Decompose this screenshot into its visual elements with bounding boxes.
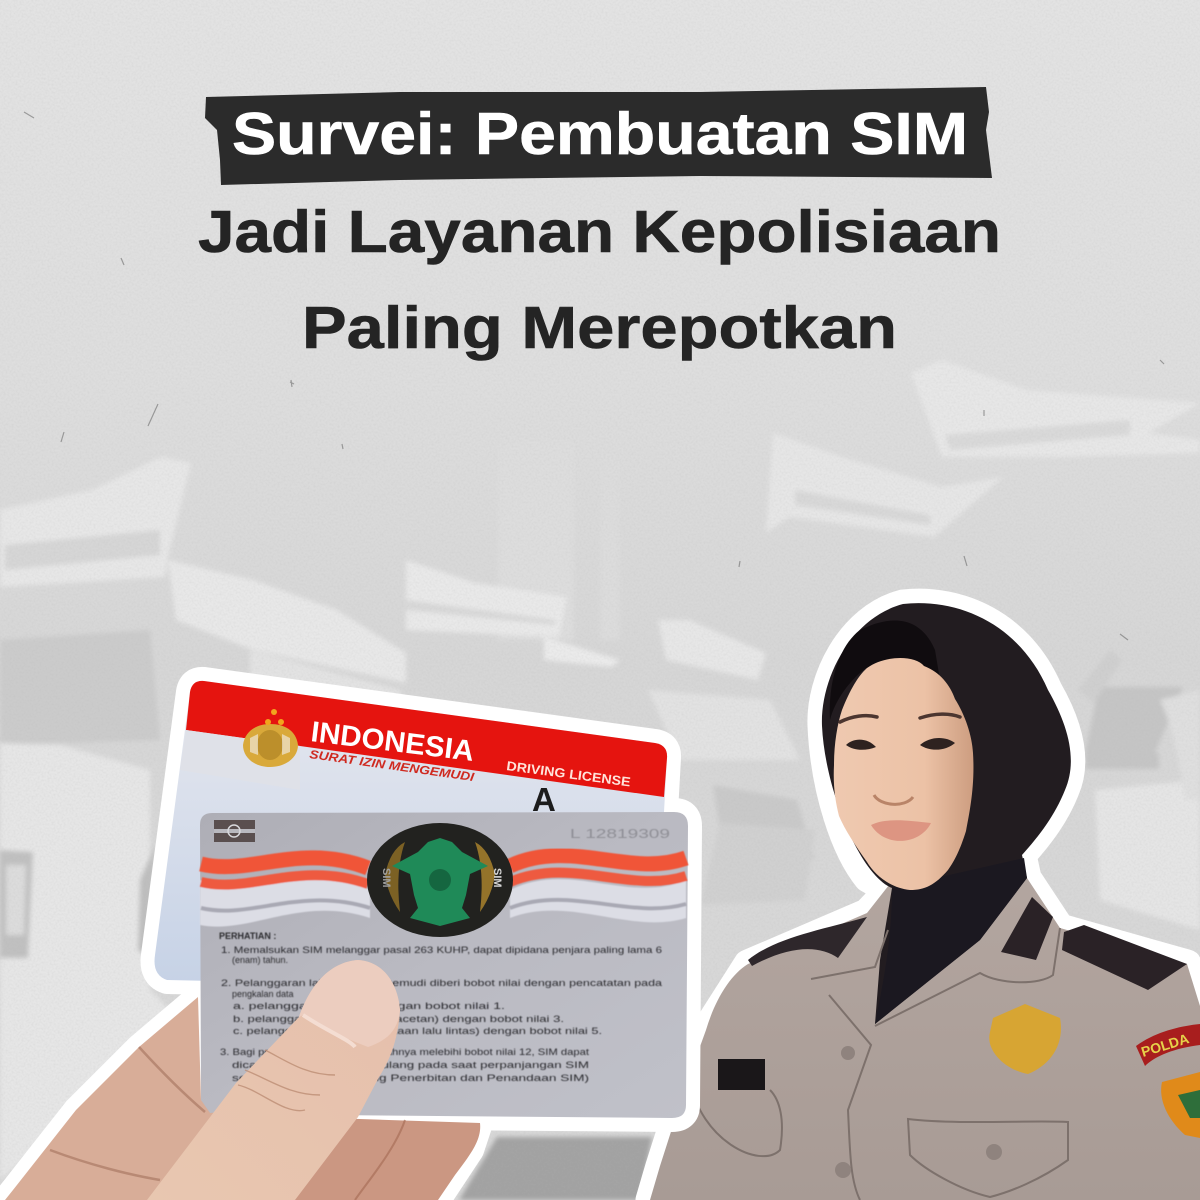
thumb [147, 960, 400, 1200]
shoulder patch [1136, 1024, 1200, 1138]
warning text: a. pelanggaran ringan dengan bobot nilai 1. [233, 1001, 505, 1011]
eyebrows and eyes [840, 714, 960, 750]
warning text: dicabut dan dilakukan uji ulang pada saat perpanjangan SIM [232, 1060, 589, 1070]
collar badge [1001, 897, 1053, 960]
title [198, 87, 1001, 361]
warning text: c. pelanggaran berat kecelakaan lalu lintas) dengan bobot nilai 5. [233, 1026, 602, 1036]
title line 1: Survei: Pembuatan SIM [232, 101, 968, 167]
title highlight banner [205, 87, 992, 185]
hologram seal [367, 823, 513, 937]
seal label left: SIM [380, 868, 392, 888]
warning text: 3. Bagi pemegang SIM yang jumlahnya melebihi bobot nilai 12, SIM dapat [220, 1047, 590, 1057]
hijab [822, 603, 1071, 1024]
white sticker outline [5, 681, 688, 1200]
warning text [219, 931, 662, 1083]
warning text: 2. Pelanggaran lalu lintas pengemudi diberi bobot nilai dengan pencatatan pada [221, 978, 662, 988]
patch label: POLDA [1139, 1030, 1191, 1060]
warning text: sesuai peraturan, tentang Penerbitan dan Penandaan SIM) [232, 1073, 589, 1083]
photo: policewoman [650, 603, 1200, 1200]
face [834, 658, 973, 890]
card subheading: SURAT IZIN MENGEMUDI [309, 747, 476, 784]
chip mark [214, 820, 255, 842]
warning text: (enam) tahun. [232, 955, 288, 965]
title line 3: Paling Merepotkan [302, 295, 897, 361]
uniform buttons [835, 1046, 1002, 1178]
scratches and flecks [24, 112, 1164, 640]
hand and thumb [5, 960, 480, 1200]
seal label right: SIM [491, 868, 503, 888]
uniform [650, 865, 1200, 1200]
right epaulette [1062, 925, 1187, 990]
left epaulette [748, 917, 867, 966]
license class: A [532, 781, 556, 818]
driving license label: DRIVING LICENSE [506, 758, 632, 790]
photo: hand holding SIM cards [5, 681, 688, 1200]
name tag [718, 1059, 765, 1090]
nose and lips [871, 795, 931, 841]
title line 2: Jadi Layanan Kepolisiaan [198, 199, 1001, 265]
police emblem [243, 709, 298, 767]
warning text: 1. Memalsukan SIM melanggar pasal 263 KUHP, dapat dipidana penjara paling lama 6 [221, 945, 662, 955]
warning text: PERHATIAN : [219, 931, 276, 941]
faded background photo: police officers in caps [0, 360, 1200, 1200]
card heading: INDONESIA [309, 716, 476, 768]
warning text: b. pelanggaran sedang kemacetan) dengan bobot nilai 3. [233, 1014, 564, 1024]
back card: Indonesia driving license [154, 681, 667, 985]
warning text: pengkalan data [232, 989, 294, 999]
flag waves [200, 856, 686, 927]
chest badge [989, 1004, 1061, 1074]
fingers [5, 997, 240, 1200]
front card: SIM back side [200, 812, 688, 1118]
collar and seams [690, 928, 1068, 1200]
thumbnail [299, 960, 400, 1047]
white sticker outline [650, 603, 1200, 1200]
serial number: L 12819309 [570, 826, 670, 841]
